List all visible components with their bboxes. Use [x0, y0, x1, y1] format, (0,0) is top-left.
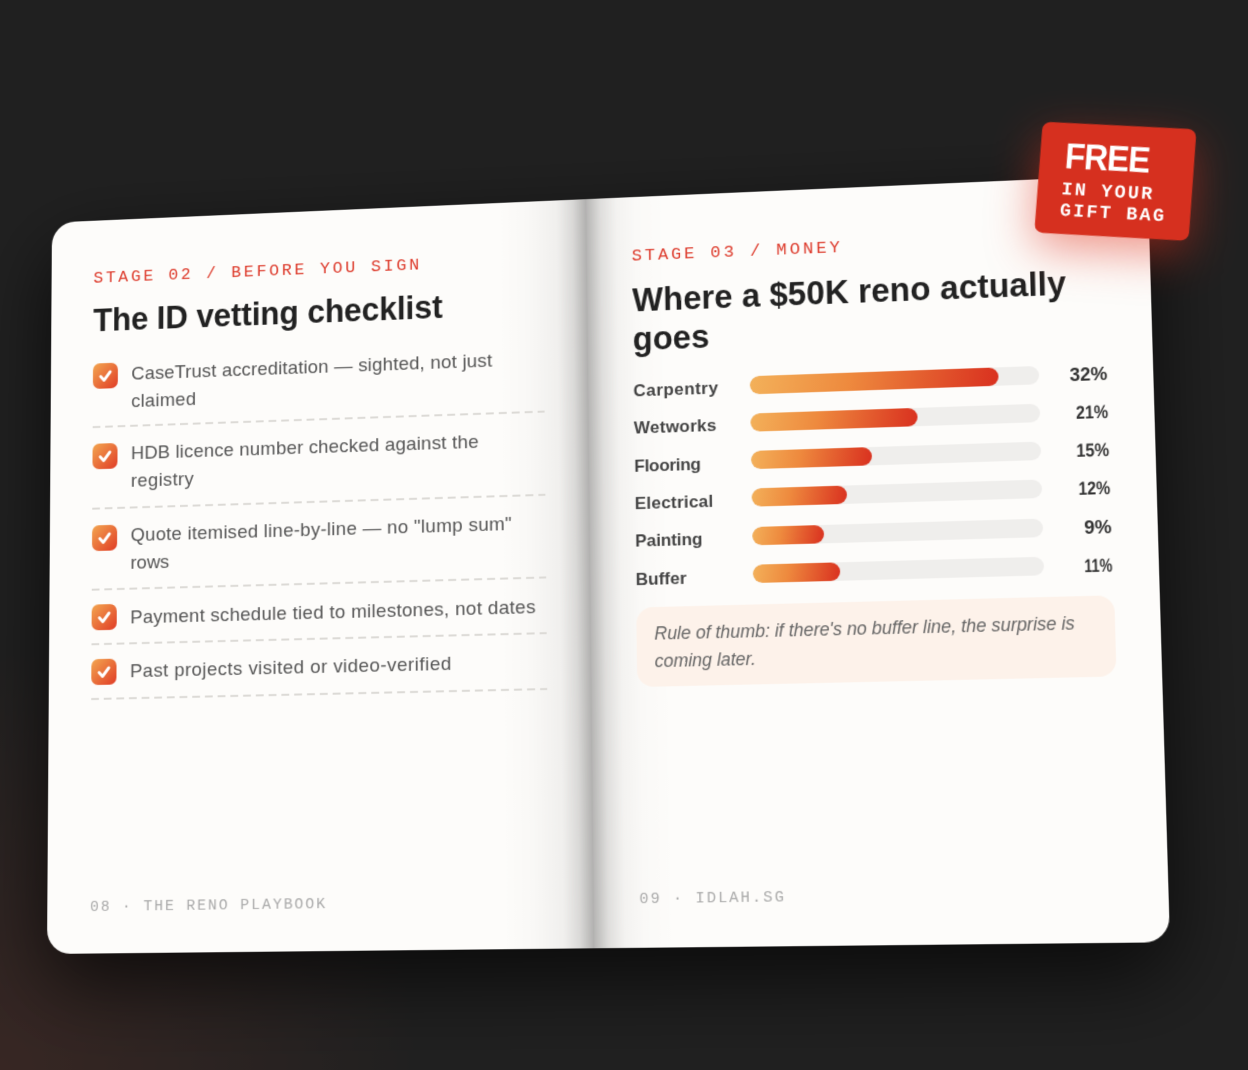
- value: Flooring: 15%: [1076, 439, 1110, 461]
- checklist item 1: [92, 351, 493, 412]
- value: Buffer: 11%: [1084, 555, 1113, 576]
- divider 4: [91, 632, 547, 645]
- item text: Quote itemised line-by-line — no "lump sum": [131, 514, 512, 546]
- item text: Past projects visited or video-verified: [130, 654, 452, 682]
- item text: [95, 444, 512, 573]
- item text: [131, 351, 493, 412]
- checklist item 5: [91, 654, 452, 686]
- checklist item 4: [91, 444, 536, 630]
- label: Wetworks: Wetworks: [634, 416, 717, 438]
- divider 3: [92, 576, 546, 591]
- icon: check: [91, 659, 117, 685]
- item text: claimed: [131, 389, 196, 412]
- value: Painting: 9%: [1084, 516, 1112, 538]
- label: Painting: Painting: [635, 530, 703, 551]
- item text: HDB licence number checked against the: [131, 432, 479, 464]
- icon: check: [93, 363, 118, 389]
- divider 1: [93, 411, 545, 428]
- item text: Payment schedule tied to milestones, not dates: [130, 597, 536, 628]
- divider 5: [91, 687, 547, 700]
- label: Carpentry: Carpentry: [633, 378, 719, 400]
- icon: check: [92, 604, 117, 630]
- label: Flooring: Flooring: [634, 454, 701, 475]
- value: Carpentry: 32%: [1069, 363, 1108, 385]
- eyebrow: stage 02: STAGE 02 / BEFORE YOU SIGN: [93, 256, 422, 288]
- bar: Electrical: [752, 480, 1043, 507]
- badge subtext: IN YOUR: [1060, 180, 1155, 205]
- heading: where a $50K reno goes: Where a $50K reno actually: [632, 265, 1066, 318]
- callout text: [654, 613, 1075, 671]
- heading: where a $50K reno goes: goes: [633, 318, 710, 357]
- footer right: 09 · IDLAH.SG: [639, 889, 786, 908]
- bar: Flooring: [751, 442, 1042, 469]
- checklist item 3: [92, 444, 512, 573]
- heading: where a $50K reno goes: [632, 265, 1066, 358]
- value: Wetworks: 21%: [1076, 401, 1109, 423]
- badge subtext: GIFT BAG: [1059, 202, 1166, 228]
- icon: check: [92, 525, 117, 551]
- badge: free in your gift bag: [1034, 122, 1196, 241]
- item text: CaseTrust accreditation — sighted, not just: [131, 351, 492, 385]
- callout text: Rule of thumb: if there's no buffer line, the surprise is: [654, 613, 1075, 644]
- value: Electrical: 12%: [1078, 478, 1111, 499]
- item text: rows: [130, 551, 169, 573]
- label: Electrical: Electrical: [635, 492, 714, 513]
- item text: registry: [131, 469, 194, 491]
- panel: right page budget: [586, 174, 1170, 948]
- open book: [47, 174, 1170, 954]
- bar: Carpentry: [750, 365, 1040, 394]
- callout text: coming later.: [655, 648, 756, 671]
- label: Buffer: Buffer: [636, 568, 687, 589]
- bar: Wetworks: [751, 403, 1041, 432]
- divider 2: [92, 494, 545, 510]
- footer left: 08 · THE RENO PLAYBOOK: [90, 895, 327, 916]
- icon: check: [92, 443, 118, 469]
- bar chart: [633, 363, 1113, 589]
- eyebrow: stage 03: STAGE 03 / MONEY: [632, 238, 843, 266]
- badge subtext: [1059, 180, 1166, 228]
- bar: Painting: [752, 518, 1044, 545]
- item text: [131, 432, 479, 491]
- badge headline: FREE: [1063, 135, 1151, 181]
- panel: left page checklist: [47, 199, 594, 954]
- checklist item 2: [92, 432, 479, 491]
- heading: ID vetting checklist: The ID vetting checklist: [93, 289, 443, 338]
- bar: Buffer: [753, 557, 1044, 583]
- callout: rule of thumb: [636, 595, 1116, 687]
